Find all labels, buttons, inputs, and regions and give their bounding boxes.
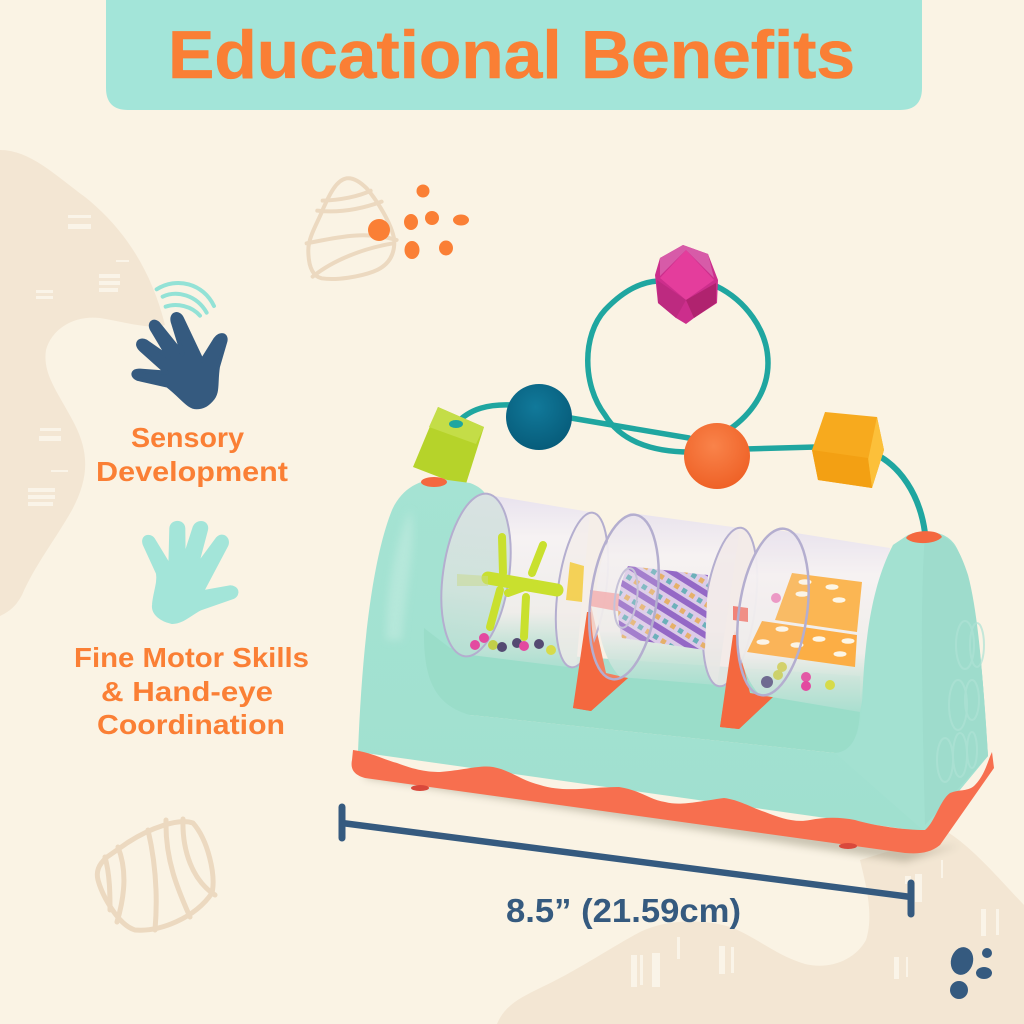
toy: teal bead wire and beads [413,245,925,533]
background blob left [0,150,165,616]
toy: right end cap [835,532,988,832]
jack toy [488,537,557,637]
toy: mint body [358,479,988,832]
dimension line [342,807,911,914]
icon: waving hand with sensory waves [133,283,226,407]
coloured beads [470,633,556,655]
toy: soft floor shadow [365,770,960,862]
bead: green cube [413,407,484,487]
toy: rubber feet [411,785,857,849]
toy: second clear tube with purple spiral [580,510,766,690]
coloured beads [761,593,835,691]
toy: coral wavy base [352,750,994,853]
label: sensory development [96,422,288,487]
bead: gold cube [812,412,884,488]
toy: red pegs where the wire enters [421,477,942,543]
decorative striped pebble doodle [97,819,215,930]
decorative navy dots [948,945,992,999]
title: Educational Benefits [168,17,855,93]
bead: orange ball [684,423,750,489]
label: fine motor skills and hand-eye coordination [74,642,309,740]
toy: third clear tube with orange flaps [728,524,890,712]
icon: open mint hand [144,523,237,622]
toy: front part of second support [720,635,773,729]
decorative shell doodle with orange dots [307,178,469,279]
orange perforated flaps [747,573,862,667]
toy: sheen on left arch [386,510,413,640]
purple spiral drum [618,566,708,650]
hub connectors [590,590,628,612]
label: sensory development: Development [96,456,288,487]
background blob bottom right [497,833,1024,1024]
label: sensory development: Sensory [131,422,244,453]
toy: rear tube supports [573,605,773,729]
toy: first clear tube with jack [432,489,617,671]
bead: blue ball [506,384,572,450]
label: fine motor skills and hand-eye coordination: Coordination [97,709,285,740]
toy: floor of the cavity [424,628,860,753]
title banner [106,0,922,110]
label: fine motor skills and hand-eye coordination: Fine Motor Skills [74,642,309,673]
toy: front part of first support [573,612,628,711]
bead: magenta gem [655,245,718,324]
label: fine motor skills and hand-eye coordination: & Hand-eye [101,676,273,707]
dimension label: 8.5” (21.59cm) [506,892,741,929]
